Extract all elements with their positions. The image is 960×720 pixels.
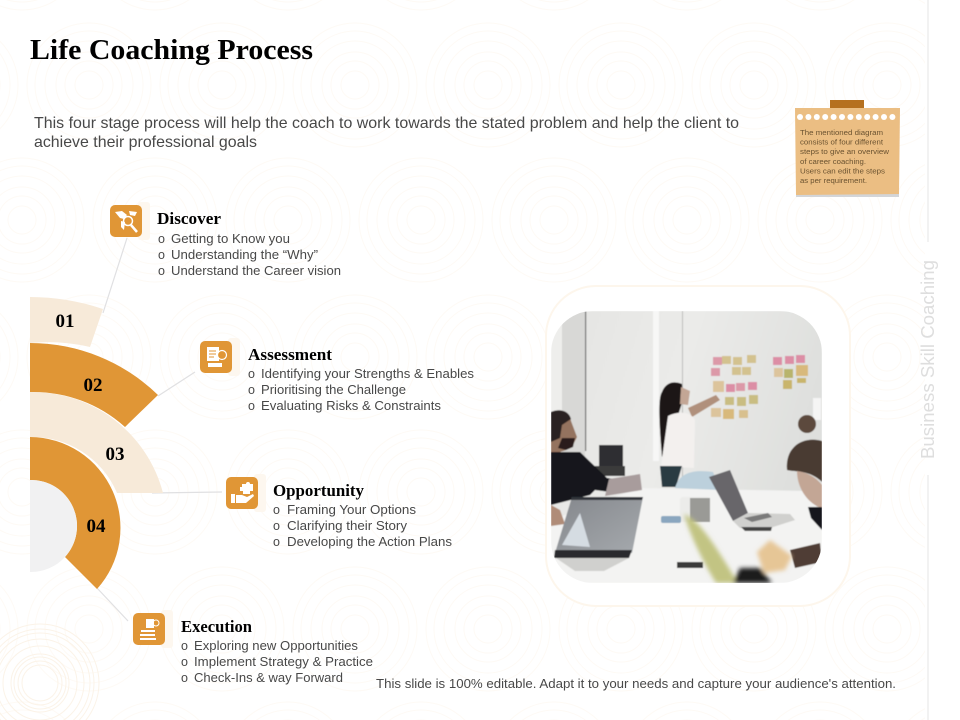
icon: map and magnifier xyxy=(110,202,150,240)
note tape xyxy=(830,100,864,108)
segment 04 xyxy=(30,437,120,589)
list: Exploring new Opportunities xyxy=(194,639,358,653)
list xyxy=(248,367,474,413)
footer note: This slide is 100% editable. Adapt it to your needs and capture your audience's attention. xyxy=(376,677,896,691)
intro text xyxy=(34,115,739,151)
sticky notes on wall xyxy=(711,355,808,419)
list xyxy=(158,232,341,278)
right seated woman xyxy=(798,415,816,433)
list xyxy=(181,639,373,685)
segment 02 xyxy=(30,343,158,427)
note text: Users can edit the steps xyxy=(800,168,886,176)
phone on table xyxy=(677,562,703,568)
note shadow xyxy=(796,190,899,197)
segment 01 xyxy=(30,297,103,347)
stage numbers: 03 xyxy=(106,444,124,465)
stage: Assessment xyxy=(200,338,474,413)
foreground blurred objects xyxy=(684,514,792,583)
far laptop xyxy=(709,470,748,521)
intro text: achieve their professional goals xyxy=(34,134,257,151)
icon: certificate document xyxy=(200,338,240,376)
icon: document stack xyxy=(133,610,173,648)
list: Understanding the “Why” xyxy=(171,248,318,262)
list: o xyxy=(181,655,188,669)
icon: hand holding puzzle piece xyxy=(226,474,266,512)
list: Check-Ins & way Forward xyxy=(194,671,343,685)
list: Identifying your Strengths & Enables xyxy=(261,367,474,381)
stage numbers: 01 xyxy=(56,311,74,332)
note text: of career coaching. xyxy=(800,159,866,166)
note holes xyxy=(797,114,895,120)
list: o xyxy=(273,503,280,517)
list xyxy=(273,503,452,549)
laptop held by man xyxy=(605,474,642,496)
centre semicircle xyxy=(30,480,77,572)
list: o xyxy=(181,639,188,653)
side label and rule: Business Skill Coaching xyxy=(918,260,938,459)
photo card xyxy=(546,286,850,606)
note text: as per requirement. xyxy=(800,178,867,185)
list: o xyxy=(181,671,188,685)
title: Life Coaching Process xyxy=(30,35,313,66)
stage numbers xyxy=(56,311,124,537)
list: o xyxy=(158,264,165,278)
note paper xyxy=(795,108,900,195)
list: Implement Strategy & Practice xyxy=(194,655,373,669)
table xyxy=(551,488,822,583)
wall features xyxy=(552,326,561,410)
heading: Execution xyxy=(181,617,252,636)
dark equipment behind table xyxy=(599,445,623,466)
list: o xyxy=(248,383,255,397)
stage numbers: 02 xyxy=(84,375,102,396)
card backing xyxy=(546,286,850,606)
near laptop xyxy=(555,497,643,553)
sticky note xyxy=(795,100,900,197)
list: o xyxy=(248,399,255,413)
list: Getting to Know you xyxy=(171,232,290,246)
list: o xyxy=(273,535,280,549)
note text: The mentioned diagram xyxy=(800,130,883,137)
list: Evaluating Risks & Constraints xyxy=(261,399,441,413)
list: o xyxy=(248,367,255,381)
list: Prioritising the Challenge xyxy=(261,383,406,397)
list: Developing the Action Plans xyxy=(287,535,452,549)
intro text: This four stage process will help the coach to work towards the stated problem and help the client to xyxy=(34,115,739,132)
heading: Discover xyxy=(157,209,221,228)
stage numbers: 04 xyxy=(86,516,106,537)
mugs xyxy=(680,497,710,522)
note text xyxy=(800,130,890,185)
note text: steps to give an overview xyxy=(800,149,890,156)
note text: consists of four different xyxy=(800,140,883,146)
segment 03 xyxy=(30,392,163,493)
list: Clarifying their Story xyxy=(287,519,408,533)
list: o xyxy=(158,232,165,246)
decorative rings bottom left xyxy=(0,624,99,720)
heading: Opportunity xyxy=(273,481,365,500)
list: Framing Your Options xyxy=(287,503,416,517)
photo: team meeting xyxy=(551,311,822,583)
list: o xyxy=(273,519,280,533)
list: o xyxy=(158,248,165,262)
list: Understand the Career vision xyxy=(171,264,341,278)
stage: Opportunity xyxy=(226,474,452,549)
heading: Assessment xyxy=(248,345,333,364)
seated man xyxy=(551,418,578,453)
radial stage diagram xyxy=(30,297,163,589)
presenting woman xyxy=(659,382,683,457)
stage: Discover xyxy=(110,202,341,278)
stage: Execution xyxy=(133,610,373,685)
connector lines xyxy=(97,238,222,621)
